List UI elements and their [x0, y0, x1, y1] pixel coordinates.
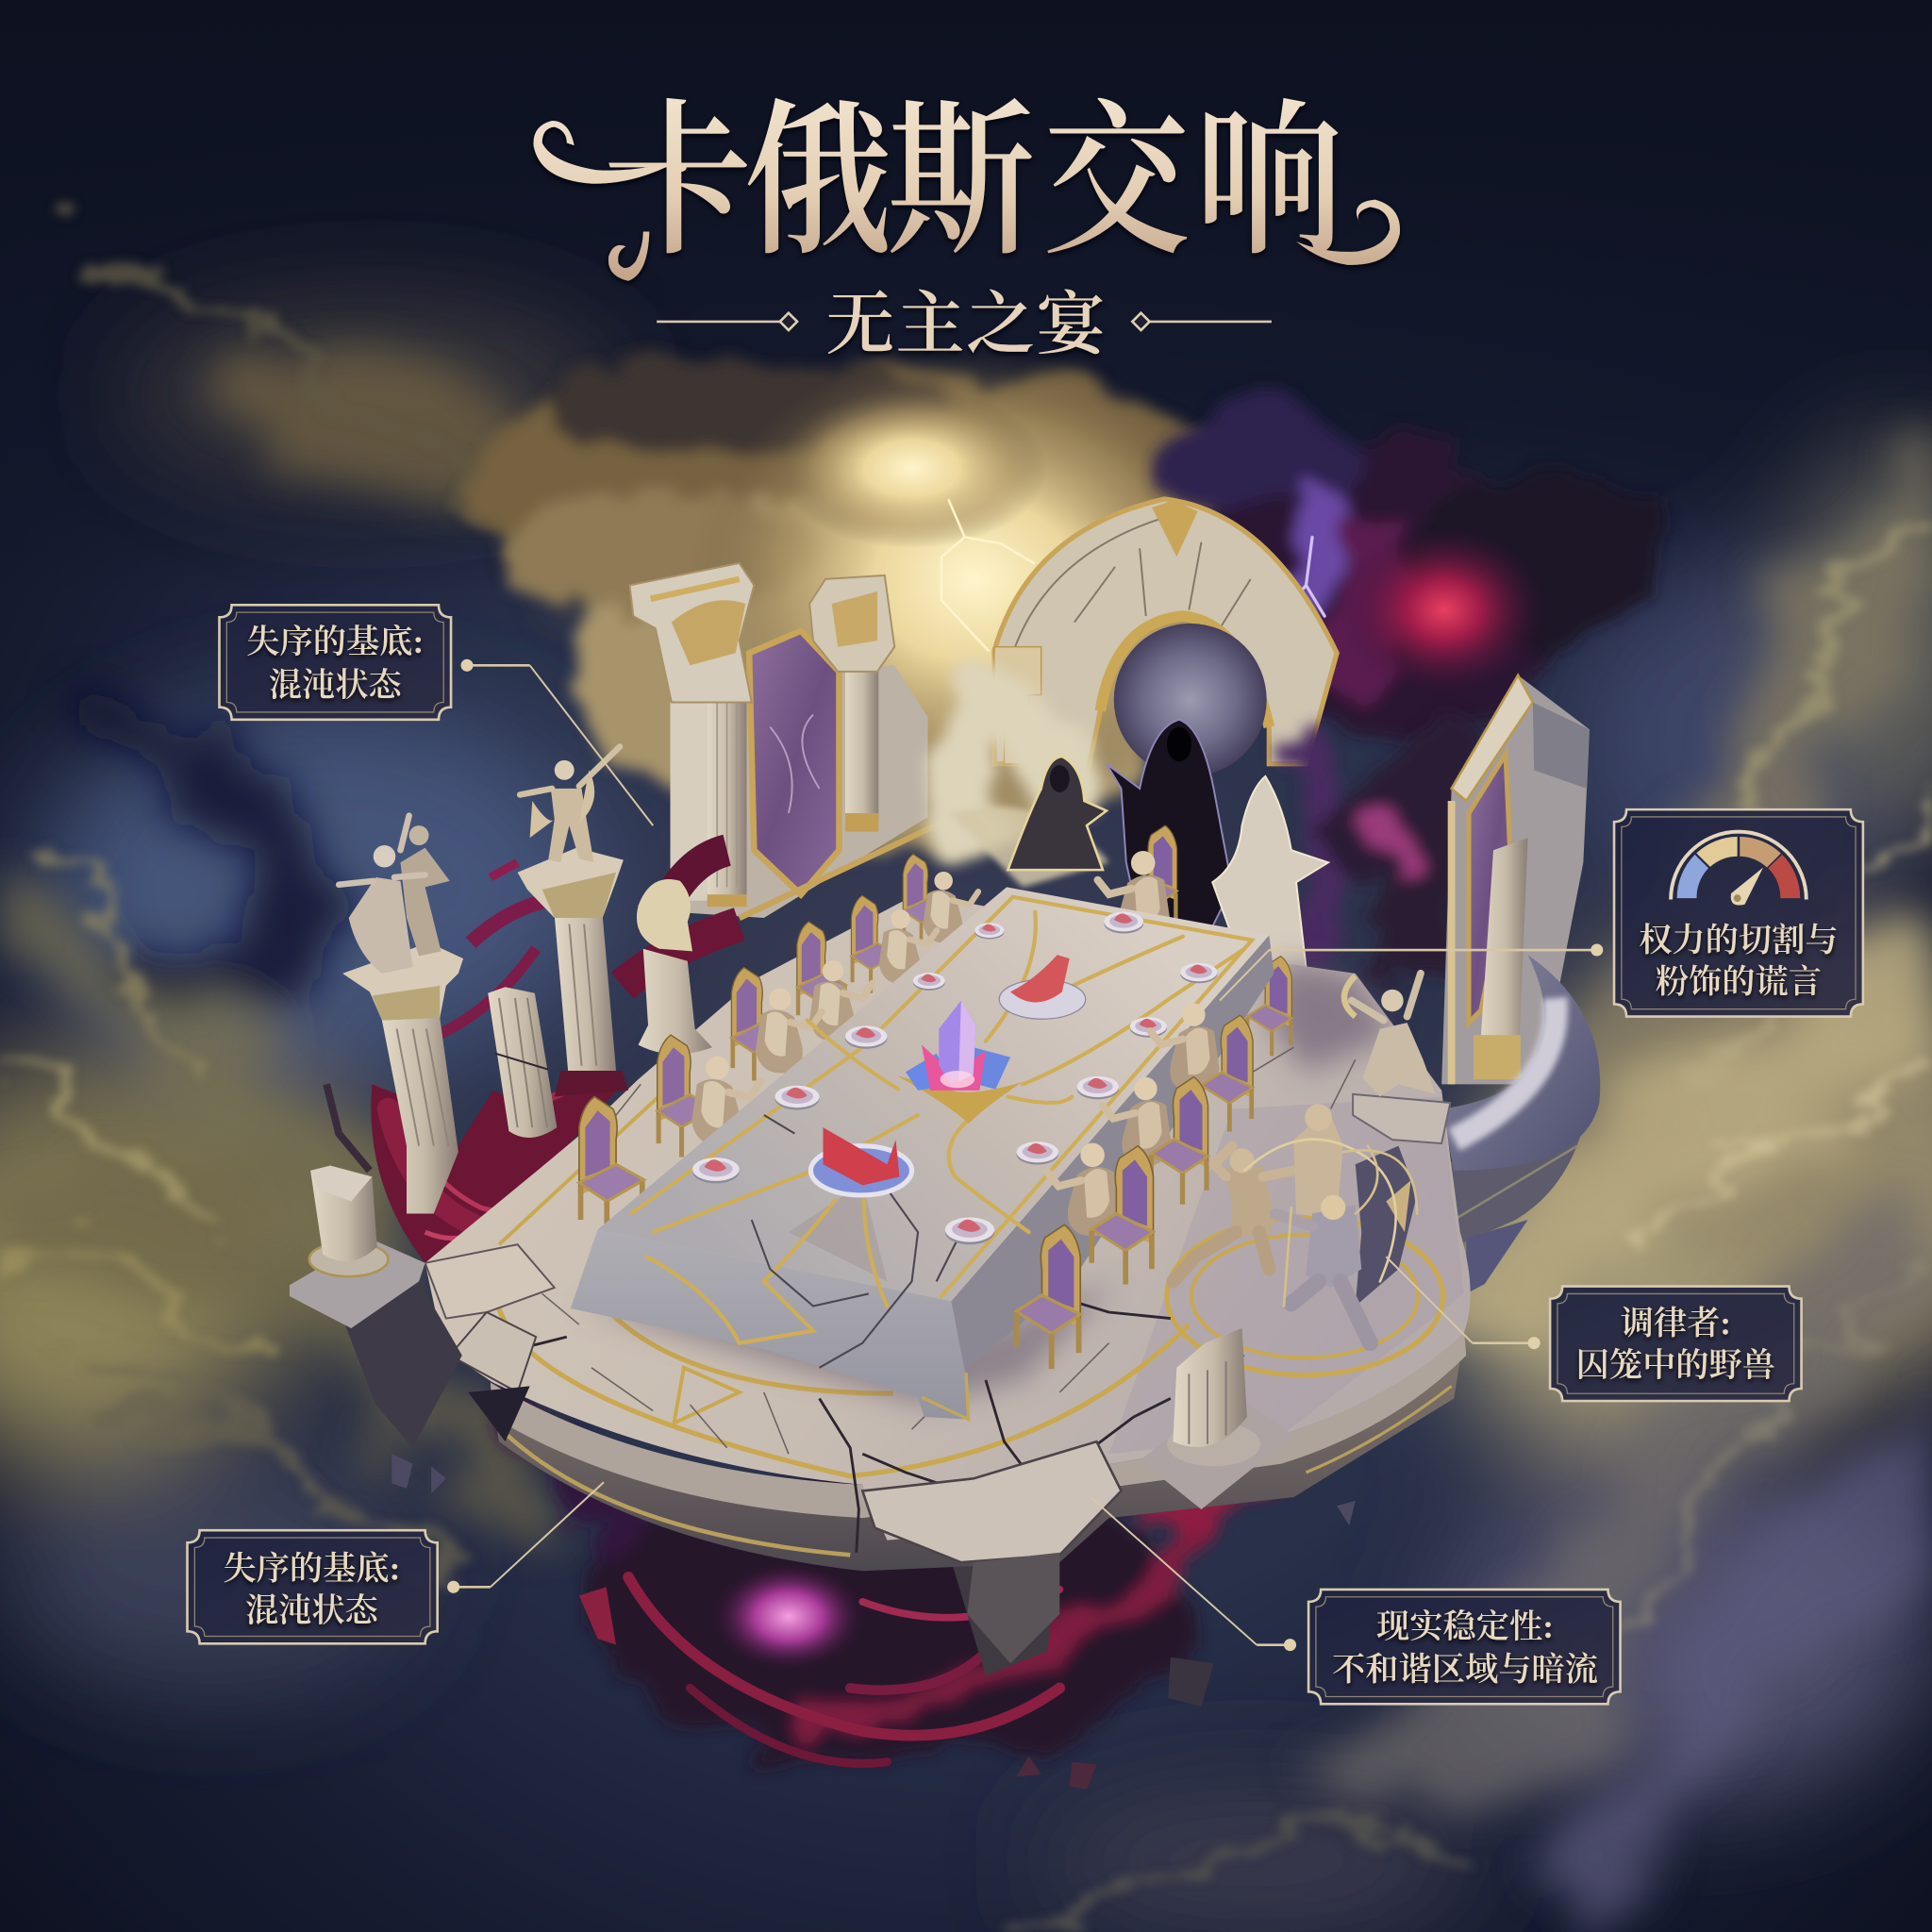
right rock base and swirling smoke: [1441, 955, 1600, 1293]
rock fragments: [391, 1454, 1356, 1789]
callout: carving of power with gauge: 权力的切割与: [1639, 922, 1839, 958]
pillar with dancing statues: [339, 816, 463, 1214]
callout: reality stability: [1091, 1497, 1621, 1704]
cornice: left broken entablature: [629, 563, 754, 702]
sky: violet and crimson rift: [1152, 394, 1675, 740]
crimson tendrils around the left pillars: [326, 850, 740, 1263]
callout: chaotic foundation (upper left): 混沌状态: [269, 667, 404, 704]
gold veins: [631, 897, 1252, 1343]
table with cracked marble cloth: [571, 887, 1274, 1420]
back wall: right ruined panel: [1441, 675, 1590, 1084]
figure: black hood: [1107, 720, 1232, 937]
underside: chaos swirl beneath the platform: [391, 1380, 1356, 1789]
callout: reality stability: 现实稳定性:: [1376, 1608, 1554, 1645]
hooded figures: [1008, 720, 1328, 979]
title swash: descender: [608, 232, 649, 281]
callout: reality stability: 不和谐区域与暗流: [1332, 1652, 1598, 1689]
callout: chaotic foundation (lower left): 混沌状态: [245, 1592, 380, 1629]
floating floor: cracked marble disc: [345, 893, 1471, 1663]
fighter: left: [1173, 1146, 1293, 1281]
table cracks: [752, 1115, 961, 1368]
table top: [597, 887, 1269, 1301]
cornice: right broken entablature: [809, 575, 894, 672]
icon: lightning bolts: [941, 500, 1324, 673]
broken edge slabs: [862, 1441, 1122, 1562]
statue: archer on the right: [1344, 974, 1436, 1096]
chairs and guests: table's far side: [579, 825, 1291, 1235]
bust on pedestal: [637, 879, 712, 1054]
callout: conductor, the caged beast: 囚笼中的野兽: [1576, 1347, 1775, 1384]
big platter: lower: [810, 1127, 912, 1195]
subtitle with ornaments: 无主之宴: [825, 286, 1108, 362]
statue: solo dancer: [520, 747, 620, 862]
broken column: middle: [488, 987, 557, 1138]
cracks: [487, 1293, 1171, 1553]
back wall: left colonnade and purple panel: [629, 563, 949, 918]
raised ledge under archer: [1353, 1094, 1450, 1143]
floor surface: [425, 893, 1471, 1541]
callout: conductor, the caged beast: [1386, 1257, 1802, 1401]
subtitle with ornaments: [657, 286, 1272, 362]
smoke: cream and dark plumes: [949, 702, 1466, 986]
centerpiece crystal: [897, 1001, 1023, 1124]
chairs and guests: table's near side: [1016, 1004, 1253, 1369]
title: 卡俄斯交响: [604, 92, 1343, 276]
sky: golden storm glow above the feast: [456, 345, 1257, 850]
callout: conductor, the caged beast: 调律者:: [1621, 1306, 1731, 1342]
fighter: horned rear beast: [1293, 1104, 1343, 1220]
figure: white hood: [1212, 776, 1328, 979]
callout: chaotic foundation (lower left): 失序的基底:: [223, 1550, 400, 1587]
big platter: upper: [999, 955, 1086, 1019]
soft table shadow: [579, 1281, 1115, 1405]
callout: chaotic foundation (upper left): 失序的基底:: [246, 624, 424, 660]
callout: chaotic foundation (lower left): [188, 1482, 604, 1643]
broken column: far left: [290, 1166, 425, 1328]
rim: upper lip: [491, 1328, 1466, 1518]
title swash: right: [1296, 200, 1400, 265]
panel: violet marble: [749, 631, 839, 894]
title swash: left: [533, 121, 680, 184]
cloth: side drape: [951, 935, 1274, 1370]
statues: struggling beasts in the cage: [1173, 1104, 1417, 1343]
statue: dancing couple: [339, 816, 450, 974]
broken column: front right: [1140, 1328, 1293, 1509]
fighter: centre: [1275, 1195, 1370, 1343]
callout: carving of power with gauge: 粉饰的谎言: [1656, 964, 1822, 1001]
rim: carved band: [491, 1337, 1464, 1571]
ruined arch with glowing rift: [994, 499, 1337, 789]
plates of food: [692, 912, 1217, 1244]
callout: chaotic foundation (upper left): [219, 605, 653, 825]
icon: gauge: [1671, 832, 1807, 905]
pillar with solo statue: [518, 747, 628, 1096]
callout: carving of power with gauge: [1220, 809, 1863, 1017]
gold inlay rings: [495, 1091, 1442, 1476]
cloth: front drape: [571, 1230, 969, 1420]
ribbons: [628, 1577, 1059, 1763]
fighter: caged beast: [1356, 1146, 1417, 1306]
figure: grey hood: [1008, 757, 1107, 870]
